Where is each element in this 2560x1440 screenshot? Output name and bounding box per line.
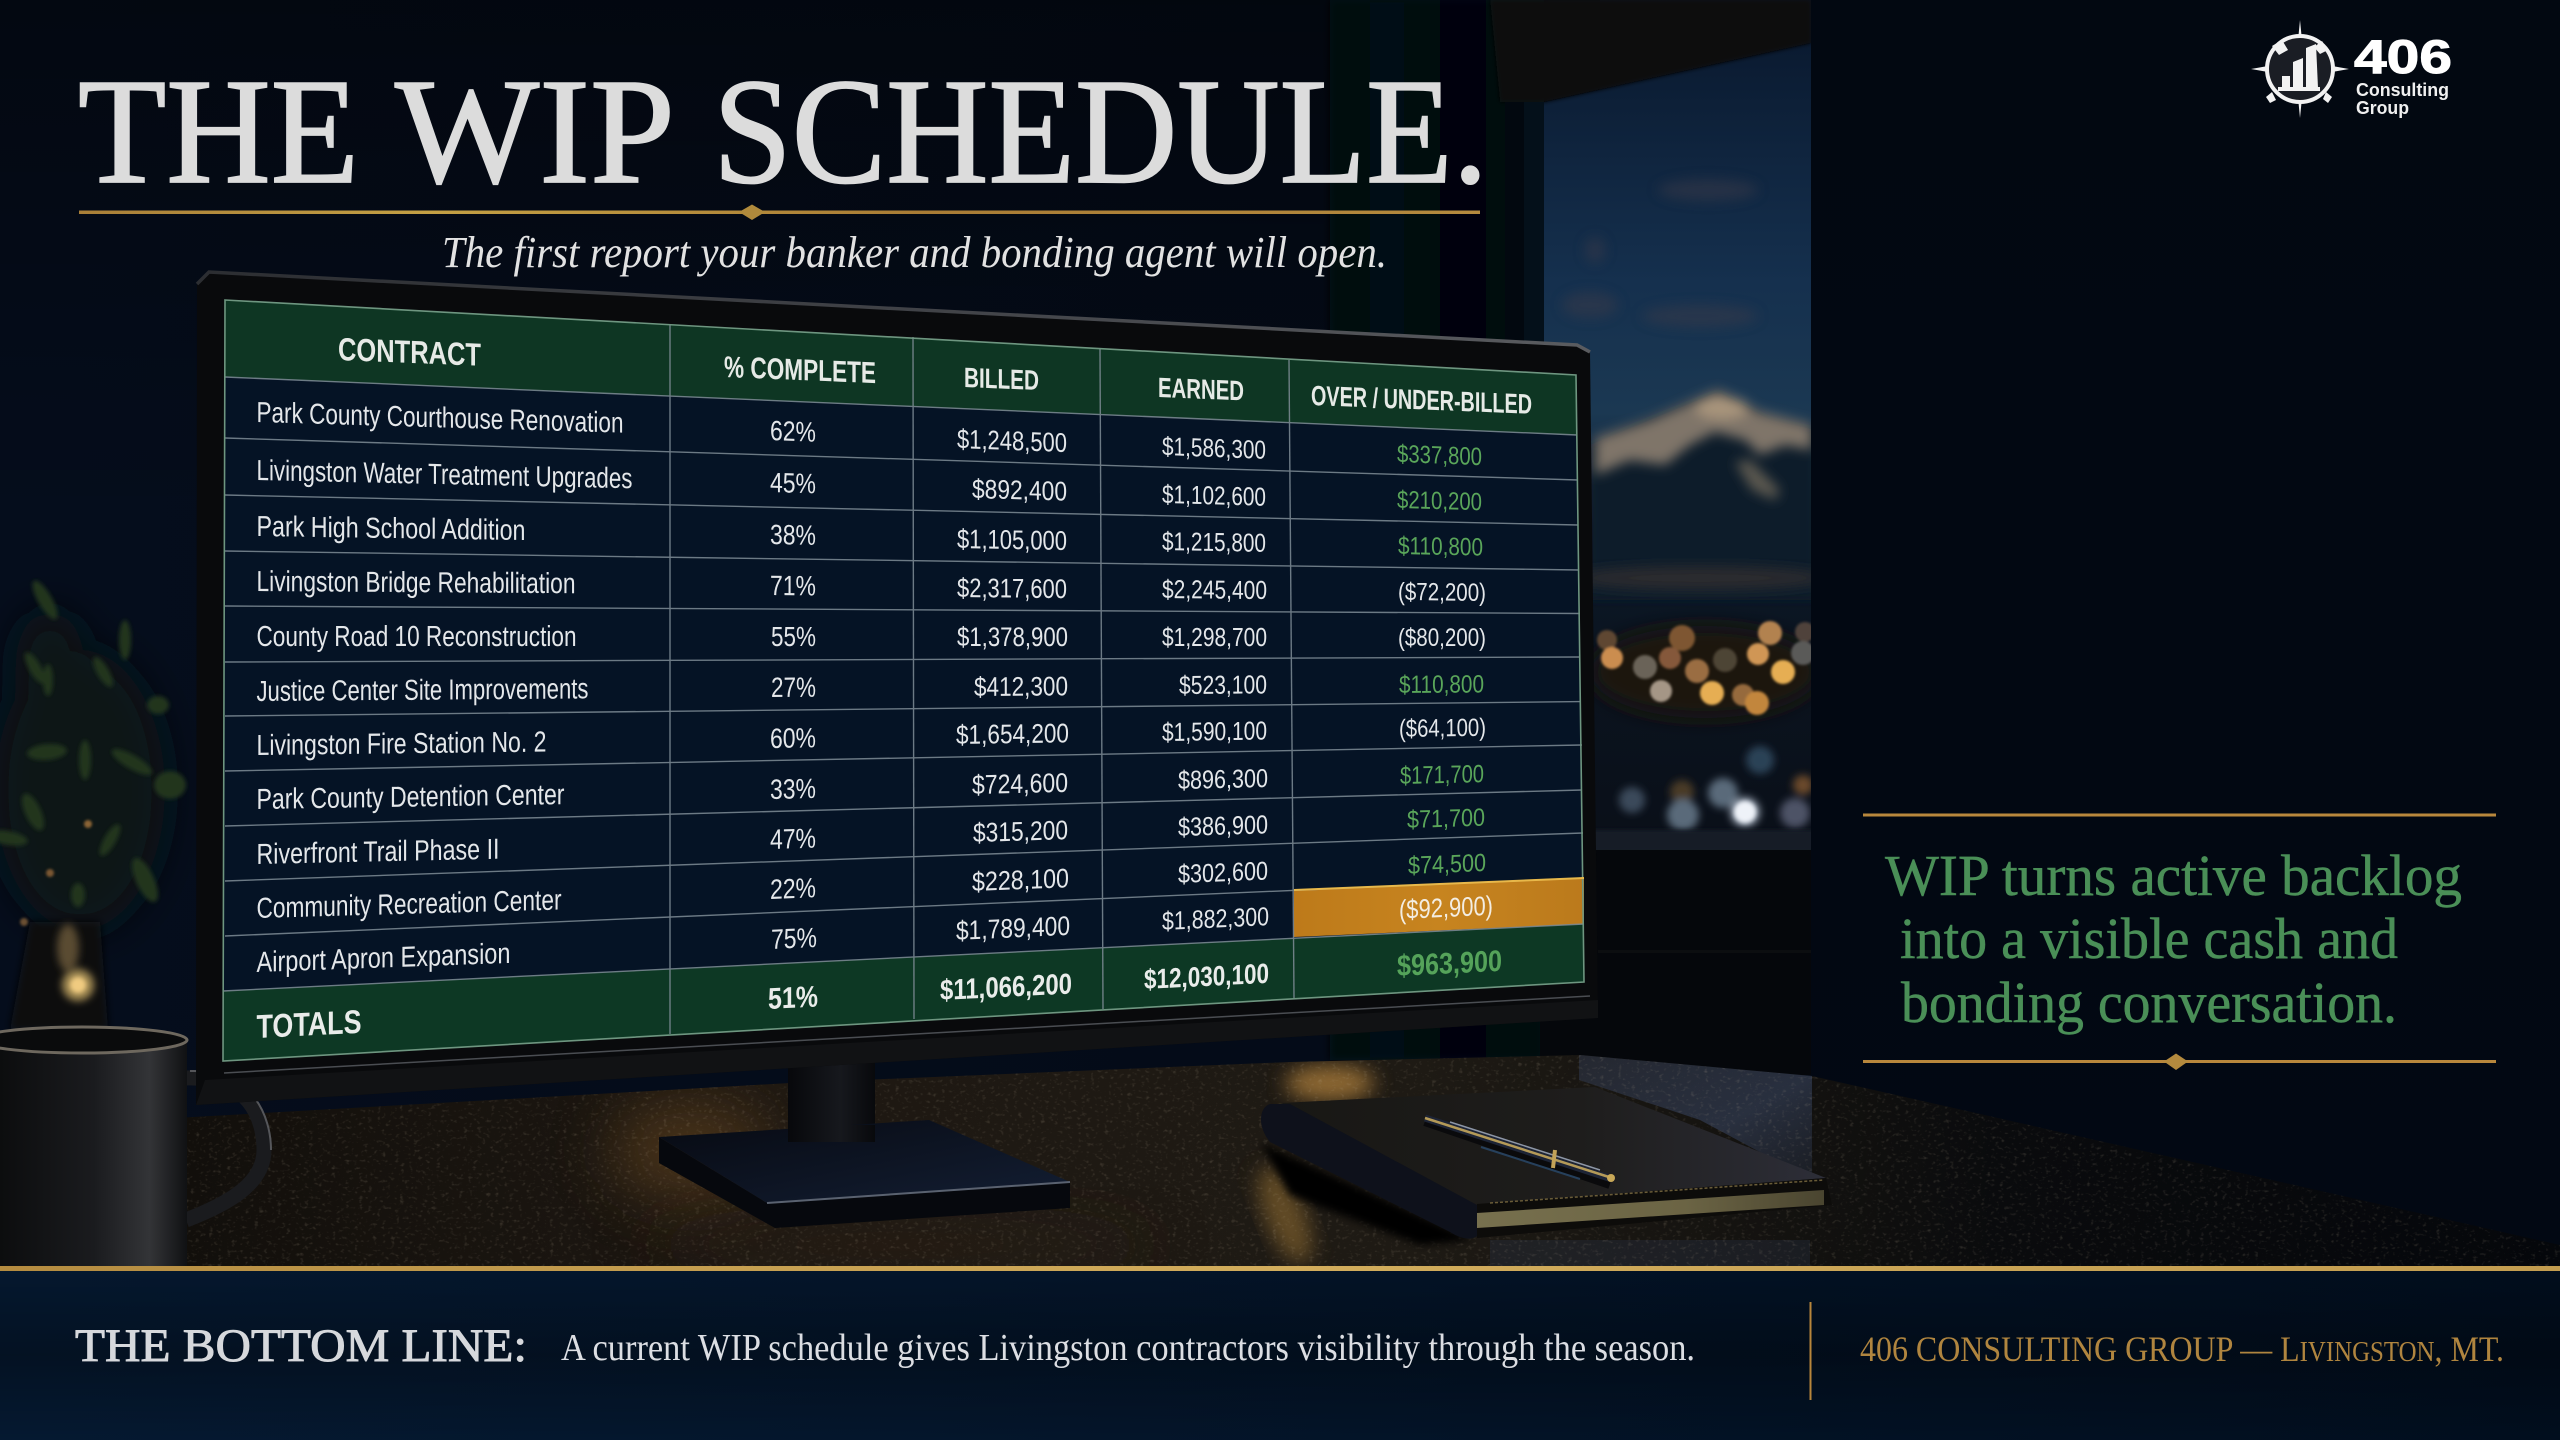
notebook shadow: [1261, 1143, 1473, 1245]
mug handle: [184, 1078, 264, 1220]
row: County Road 10 Reconstruction: 55%: [771, 621, 816, 652]
plant on left: [0, 577, 186, 1030]
row: Livingston Bridge Rehabilitation: $2,245,400: [1162, 574, 1267, 605]
row: Livingston Fire Station No. 2: 60%: [770, 722, 816, 754]
logo: 406 Consulting Group: Group: [2356, 98, 2409, 118]
row: totals: TOTALS: [256, 1003, 362, 1045]
row: Livingston Bridge Rehabilitation: ($72,200): [1398, 578, 1486, 607]
title: SCHEDULE.: [713, 47, 1488, 215]
row: Justice Center Site Improvements: 27%: [771, 672, 816, 703]
notebook pages: [1477, 1190, 1824, 1228]
row: Livingston Bridge Rehabilitation: [256, 566, 1486, 607]
row: Park County Courthouse Renovation: Park County Courthouse Renovation: [256, 397, 624, 440]
row: Livingston Bridge Rehabilitation: $2,317,600: [957, 573, 1067, 604]
row: Riverfront Trail Phase II: 47%: [770, 823, 816, 855]
subtitle: The first report your banker and bonding agent will open.: [442, 228, 1387, 277]
row: Riverfront Trail Phase II: $386,900: [1178, 809, 1268, 842]
mountain body: [1590, 392, 1815, 600]
row: County Road 10 Reconstruction: $1,298,700: [1162, 622, 1267, 652]
notebook with pen: [1261, 1087, 1832, 1245]
row: Livingston Bridge Rehabilitation: 71%: [770, 570, 816, 601]
row: Park High School Addition: $110,800: [1398, 532, 1483, 562]
row: Park High School Addition: Park High School Addition: [256, 511, 526, 547]
row: totals: $12,030,100: [1144, 958, 1269, 995]
row: Livingston Water Treatment Upgrades: $892,400: [972, 474, 1067, 507]
plant pot: [10, 922, 108, 1030]
title: [78, 47, 1488, 215]
row: Community Recreation Center: $228,100: [972, 863, 1069, 897]
row: Park County Detention Center: $171,700: [1400, 760, 1484, 790]
row: Livingston Water Treatment Upgrades: Livingston Water Treatment Upgrades: [256, 455, 632, 495]
row: Livingston Fire Station No. 2: ($64,100): [1399, 714, 1486, 743]
logo: 406 Consulting Group: [2251, 20, 2452, 118]
callout: WIP turns backlog into conversation: [1863, 814, 2496, 1070]
firm attribution: 406 CONSULTING GROUP — LIVINGSTON, MT.: [1860, 1329, 2504, 1369]
row: Justice Center Site Improvements: $523,100: [1179, 669, 1267, 700]
row: Park High School Addition: [256, 511, 1483, 562]
bottom line sentence: A current WIP schedule gives Livingston contractors visibility through the season.: [561, 1327, 1695, 1369]
row: Justice Center Site Improvements: [256, 669, 1484, 708]
row: Riverfront Trail Phase II: [256, 804, 1485, 871]
row: totals: $11,066,200: [940, 968, 1072, 1007]
row: Airport Apron Expansion: $1,882,300: [1162, 901, 1269, 936]
clouds: [1562, 179, 1758, 327]
row: Airport Apron Expansion: Airport Apron Expansion: [256, 938, 511, 979]
town light bokeh: [1597, 621, 1815, 715]
row: Community Recreation Center: $302,600: [1178, 855, 1268, 889]
row: Park County Detention Center: 33%: [770, 773, 816, 805]
header labels: % COMPLETE: [724, 351, 876, 390]
header labels: EARNED: [1158, 372, 1244, 406]
row: Community Recreation Center: 22%: [770, 872, 816, 905]
lower wall below window: [1540, 850, 1811, 1075]
row: Airport Apron Expansion: 75%: [771, 922, 817, 955]
desk surface with speckled stone and amber reflections: [187, 1055, 2560, 1266]
row: Livingston Water Treatment Upgrades: $1,102,600: [1162, 479, 1266, 512]
row: Park County Detention Center: $724,600: [972, 768, 1068, 800]
title rule with diamond: [79, 204, 1480, 220]
grid lines: [223, 325, 1584, 1034]
row: Livingston Water Treatment Upgrades: [256, 455, 1482, 516]
row: Community Recreation Center: [256, 849, 1486, 925]
row: Livingston Fire Station No. 2: [256, 714, 1486, 762]
row: Park County Detention Center: Park County Detention Center: [256, 779, 565, 816]
row: Park County Courthouse Renovation: $337,800: [1397, 440, 1482, 471]
callout: WIP turns backlog into conversation: bonding conversation.: [1901, 970, 2397, 1035]
row: Park High School Addition: 38%: [770, 519, 816, 551]
leaves: [0, 577, 186, 907]
row: County Road 10 Reconstruction: [256, 621, 1486, 653]
row: Justice Center Site Improvements: Justice Center Site Improvements: [256, 673, 588, 708]
callout: WIP turns backlog into conversation: WIP turns active backlog: [1885, 843, 2462, 908]
table header band: [225, 300, 1577, 435]
row: Park County Detention Center: $896,300: [1178, 763, 1268, 795]
row: Justice Center Site Improvements: $110,800: [1399, 670, 1484, 699]
callout: WIP turns backlog into conversation: into a visible cash and: [1900, 906, 2398, 971]
row: Park High School Addition: $1,215,800: [1162, 526, 1266, 558]
row: Park County Courthouse Renovation: $1,248,500: [957, 424, 1067, 458]
bottom line heading: THE BOTTOM LINE:: [75, 1320, 527, 1372]
foliage mass: [0, 610, 165, 930]
row: County Road 10 Reconstruction: ($80,200): [1398, 624, 1486, 652]
row: Riverfront Trail Phase II: $71,700: [1407, 804, 1485, 834]
notebook cover: [1281, 1087, 1826, 1205]
bottom band: [0, 1266, 2560, 1440]
coffee mug: [0, 1027, 271, 1270]
row: totals: 51%: [768, 981, 818, 1016]
header labels: BILLED: [964, 362, 1039, 396]
row: Community Recreation Center: $74,500: [1408, 849, 1486, 880]
row: County Road 10 Reconstruction: County Road 10 Reconstruction: [256, 621, 576, 653]
icon: compass with bar chart: [2251, 20, 2349, 118]
row: Community Recreation Center: Community Recreation Center: [256, 884, 562, 925]
header labels: [338, 331, 1532, 420]
dark right wall: [1811, 0, 2560, 1270]
row: Livingston Bridge Rehabilitation: Livingston Bridge Rehabilitation: [256, 566, 576, 600]
row: Airport Apron Expansion: $1,789,400: [956, 911, 1070, 946]
row: Livingston Water Treatment Upgrades: $210,200: [1397, 486, 1482, 516]
title: THE: [78, 47, 359, 215]
orange highlighted cell: [1294, 878, 1584, 937]
totals band: [223, 924, 1584, 1061]
row: Riverfront Trail Phase II: Riverfront Trail Phase II: [256, 834, 500, 871]
row: Park County Courthouse Renovation: [256, 397, 1482, 471]
row: Airport Apron Expansion: [256, 891, 1493, 979]
window: night view of mountains and town lights: [1544, 40, 1830, 852]
row: Airport Apron Expansion: ($92,900): [1399, 891, 1493, 925]
monitor stand: [659, 1060, 1070, 1228]
logo: 406 Consulting Group: 406: [2354, 30, 2452, 83]
row: Park County Courthouse Renovation: $1,586,300: [1162, 431, 1266, 465]
row: Justice Center Site Improvements: $412,300: [974, 671, 1068, 702]
row: Livingston Fire Station No. 2: $1,590,100: [1162, 715, 1267, 747]
row: Park County Courthouse Renovation: 62%: [770, 415, 816, 448]
row: Livingston Fire Station No. 2: Livingston Fire Station No. 2: [256, 727, 546, 762]
title: WIP: [395, 47, 675, 215]
logo: 406 Consulting Group: Consulting: [2356, 80, 2449, 100]
monitor bezel: [196, 272, 1598, 1105]
gold divider line: [0, 1266, 2560, 1271]
row: County Road 10 Reconstruction: $1,378,900: [957, 622, 1068, 652]
row: Park County Detention Center: [256, 760, 1484, 816]
background: curtain beside window: [1330, 0, 1544, 1060]
row: Riverfront Trail Phase II: $315,200: [973, 815, 1068, 848]
row: Livingston Water Treatment Upgrades: 45%: [770, 467, 816, 499]
notebook edge binding: [1477, 1178, 1832, 1238]
row: Park High School Addition: $1,105,000: [957, 524, 1067, 556]
horizon haze: [1570, 566, 1830, 590]
pen: [1425, 1118, 1615, 1184]
row: totals: [256, 945, 1502, 1045]
notebook spine: [1261, 1104, 1477, 1239]
row: totals: $963,900: [1397, 945, 1502, 983]
header labels: CONTRACT: [338, 331, 481, 373]
row: Livingston Fire Station No. 2: $1,654,200: [956, 718, 1069, 750]
WIP table on monitor screen: [223, 300, 1584, 1061]
header labels: OVER / UNDER-BILLED: [1311, 380, 1532, 420]
screen background: [223, 300, 1584, 1061]
window frame: [1490, 0, 1811, 862]
snow caps: [1595, 390, 1812, 500]
